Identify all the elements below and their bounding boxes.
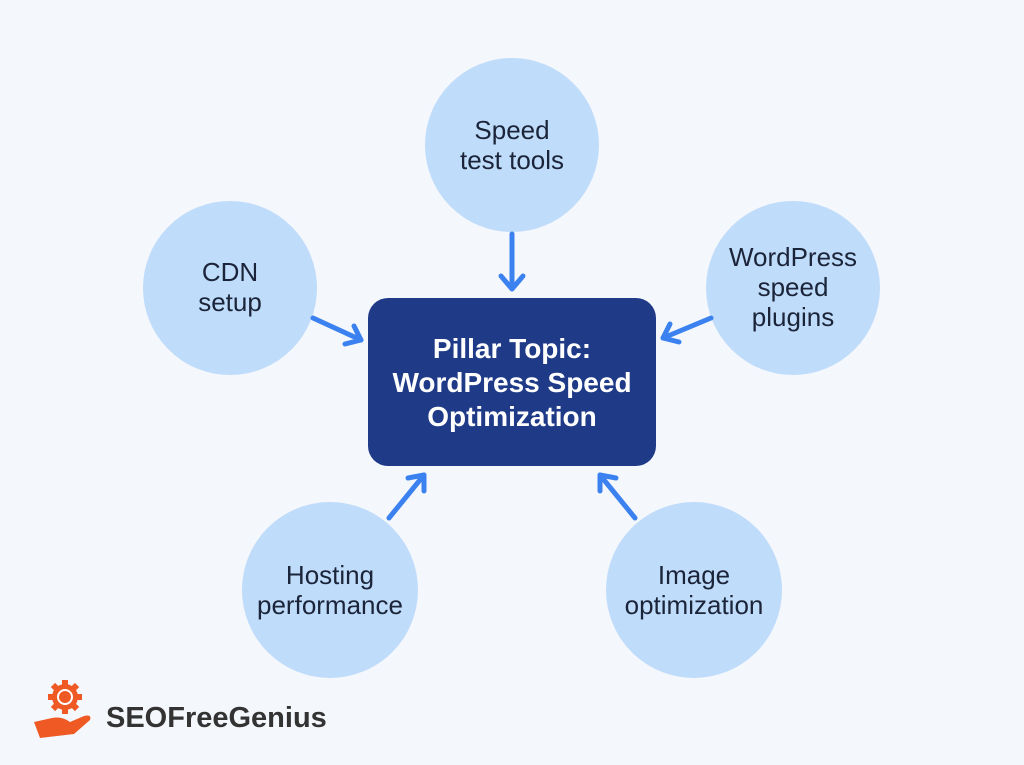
node: Hosting performance <box>242 502 418 678</box>
node: WordPress speed plugins: WordPress <box>729 242 857 272</box>
center box: pillar topic: Optimization <box>427 401 597 432</box>
node: Speed test tools: test tools <box>460 145 564 175</box>
arrow: CDN <box>313 318 361 344</box>
node: CDN setup <box>143 201 317 375</box>
node: Hosting performance: Hosting <box>286 560 374 590</box>
arrow: WordPress <box>663 318 711 342</box>
arrow: Hosting <box>389 475 424 518</box>
node: Speed test tools <box>425 58 599 232</box>
logo: SEOFreeGenius: SEOFreeGenius <box>106 702 327 734</box>
center box: pillar topic <box>368 298 656 466</box>
node: CDN setup: CDN <box>202 257 258 287</box>
node: WordPress speed plugins: plugins <box>752 302 834 332</box>
node: WordPress speed plugins: speed <box>758 272 828 302</box>
node: CDN setup: setup <box>198 287 262 317</box>
node: Image optimization <box>606 502 782 678</box>
node: Speed test tools: Speed <box>474 115 550 145</box>
arrow: Image <box>600 475 635 518</box>
center box: pillar topic: Pillar Topic: <box>433 333 591 364</box>
logo: SEOFreeGenius <box>34 680 327 738</box>
center box: pillar topic: WordPress Speed <box>392 367 632 398</box>
node: Image optimization: Image <box>658 560 730 590</box>
node: WordPress speed plugins <box>706 201 880 375</box>
node: Hosting performance: performance <box>257 590 403 620</box>
node: Image optimization: optimization <box>625 590 763 620</box>
arrow: top <box>501 234 523 289</box>
